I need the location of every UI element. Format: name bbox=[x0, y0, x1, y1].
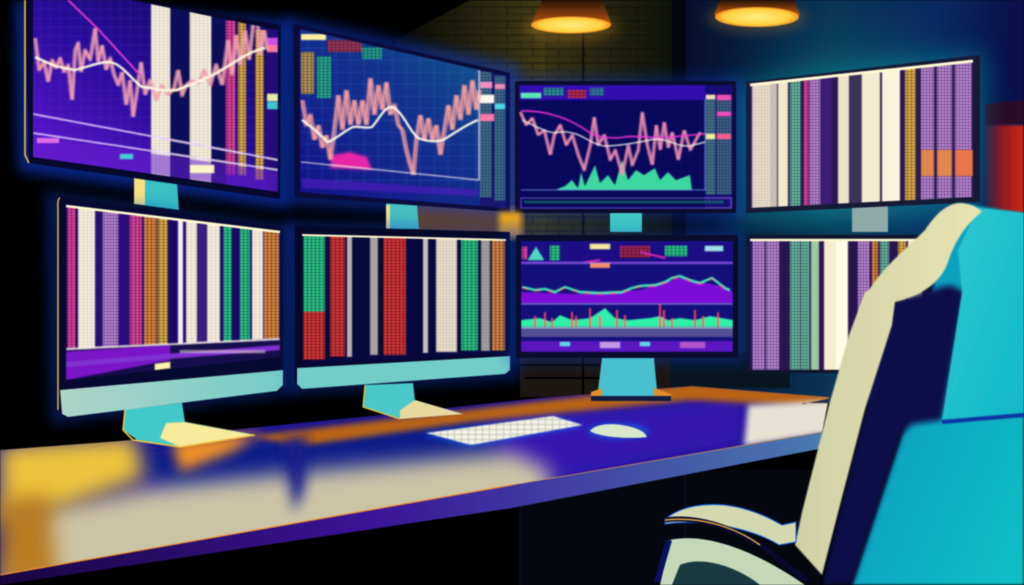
monitor 8 base bbox=[803, 398, 832, 404]
monitor 2: top center candlestick chart bbox=[285, 15, 518, 229]
monitor 5 chin bbox=[60, 370, 283, 417]
pendant lamp right bbox=[707, 0, 807, 32]
monitor 7: lower center-right chart bbox=[506, 230, 746, 401]
wall light glow between monitors bbox=[499, 212, 521, 238]
monitor 4: top right data table bbox=[735, 50, 985, 232]
monitor 5: lower left data table bbox=[45, 190, 295, 447]
armrest bbox=[657, 505, 808, 585]
mouse bbox=[587, 423, 649, 439]
desk bbox=[0, 383, 840, 585]
keyboard bbox=[421, 416, 585, 446]
monitor 1 stand bbox=[134, 178, 179, 210]
monitor 8: lower right data table bbox=[746, 235, 931, 404]
office chair bbox=[657, 203, 1024, 585]
monitor 6 chin bbox=[297, 356, 510, 389]
chair side bolster, cream bbox=[795, 203, 982, 575]
monitor 3: top center-right chart with volume bbox=[508, 75, 744, 232]
pendant lamp left bbox=[523, 0, 619, 42]
chair navy shadow band bbox=[822, 285, 965, 585]
monitor 6: lower center data table bbox=[285, 220, 520, 419]
monitor 4 stand bbox=[852, 204, 888, 232]
monitor 6 stand and foot bbox=[363, 383, 463, 419]
chair headrest lower seam bbox=[942, 413, 1024, 424]
monitor 3 stand bbox=[610, 212, 642, 232]
chair lower back, teal bbox=[852, 203, 1024, 585]
chair headrest, teal bbox=[942, 208, 1024, 420]
monitor 7 stand bbox=[591, 358, 671, 401]
monitor 2 stand bbox=[386, 203, 419, 229]
monitor 5 stand and foot bbox=[123, 402, 255, 447]
monitor 1: top left candlestick chart bbox=[15, 0, 290, 210]
